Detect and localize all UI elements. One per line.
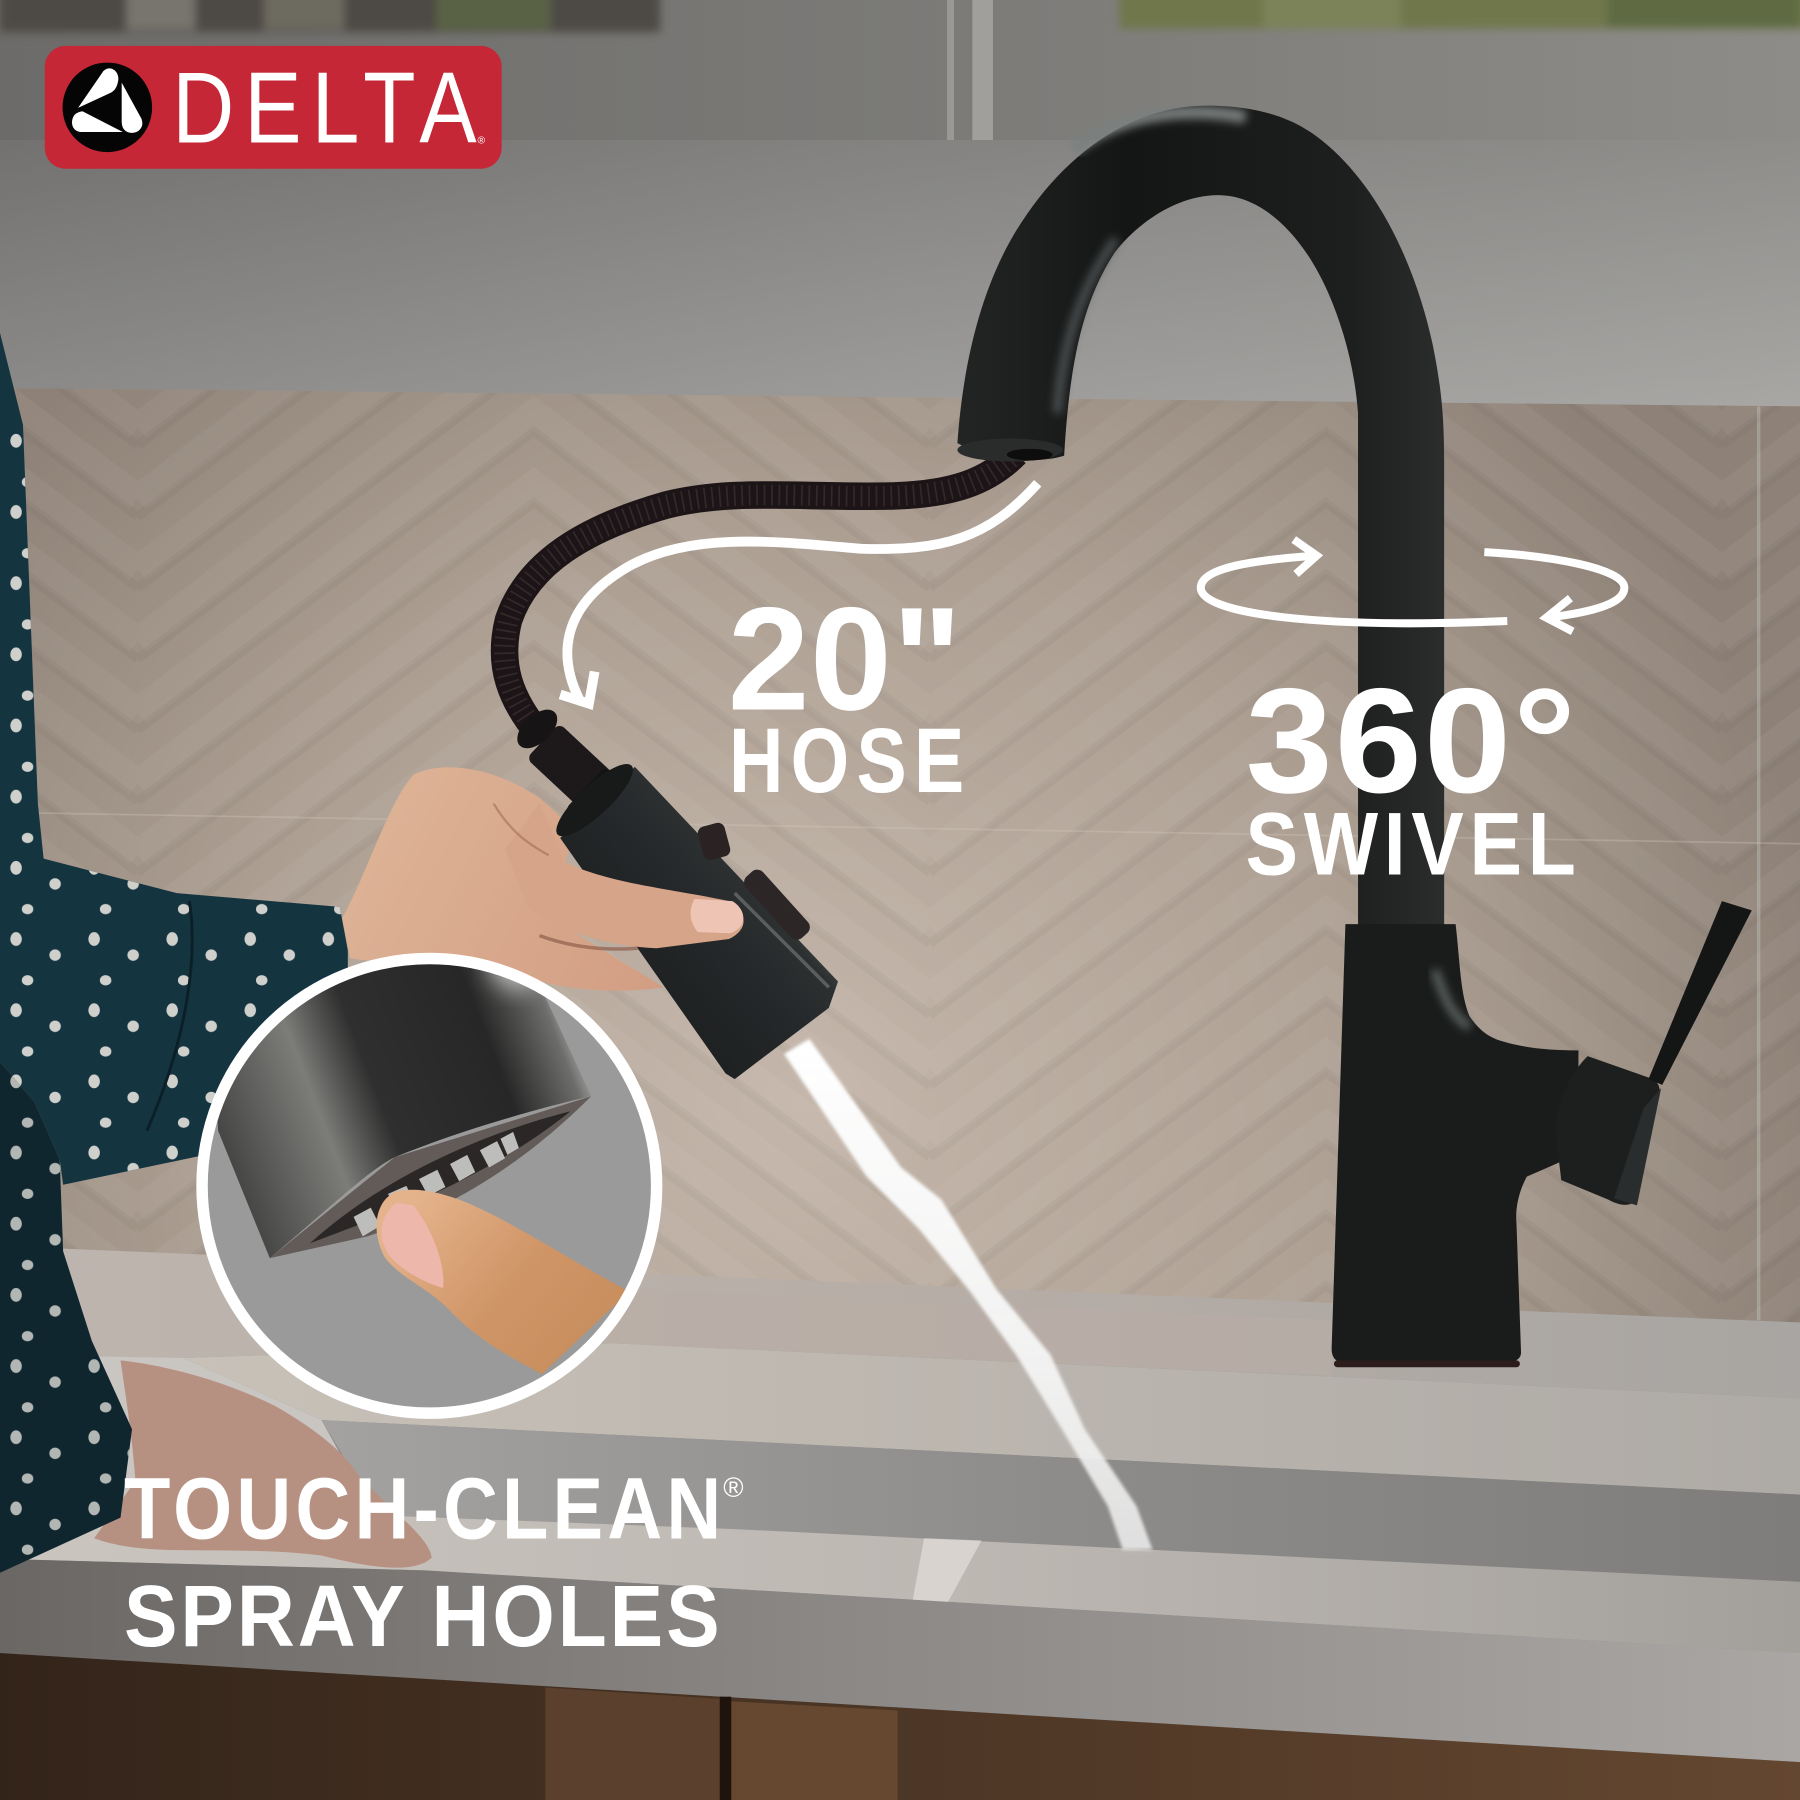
label: touch-clean spray holes: TOUCH-CLEAN [124,1460,721,1557]
label: touch-clean spray holes: SPRAY HOLES [124,1567,720,1665]
faucet base and lever handle [1332,901,1752,1367]
spray head [510,702,838,1079]
lower fingers behind spray head [342,767,664,991]
label: 360 degree swivel: SWIVEL [1246,794,1576,894]
label: 20 inch hose [728,577,964,812]
thumb across spray head [494,804,744,949]
logo mark [63,63,152,152]
countertop and sink [0,1248,1800,1762]
swivel rotation arrows [1201,540,1624,631]
label: 20 inch hose: HOSE [729,709,964,812]
logo wordmark: DELTA [172,51,477,164]
hand on the counter [94,1360,432,1568]
label: touch-clean spray holes [124,1460,744,1665]
inset circle: touch-clean close-up [202,934,657,1413]
background: grey wall band [0,140,1800,406]
label: touch-clean spray holes: ® [723,1472,744,1503]
water stream [784,1039,1153,1550]
Delta logo: ® [478,135,486,146]
label: 360 degree swivel: 360° [1246,657,1576,824]
faucet spout neck [957,106,1444,930]
background: window and upper wall [0,0,1800,140]
label: 20 inch hose: 20" [728,577,962,741]
hose length arrow [560,483,1038,704]
torso sleeve with polka dots [0,333,348,1573]
background: chevron tile backsplash [0,388,1800,1332]
Delta logo [45,46,502,169]
spray buttons [696,821,813,943]
wood cabinet [0,1653,1800,1800]
finger pressing nozzles [376,1190,629,1374]
braided pull-down hose [505,453,1016,735]
